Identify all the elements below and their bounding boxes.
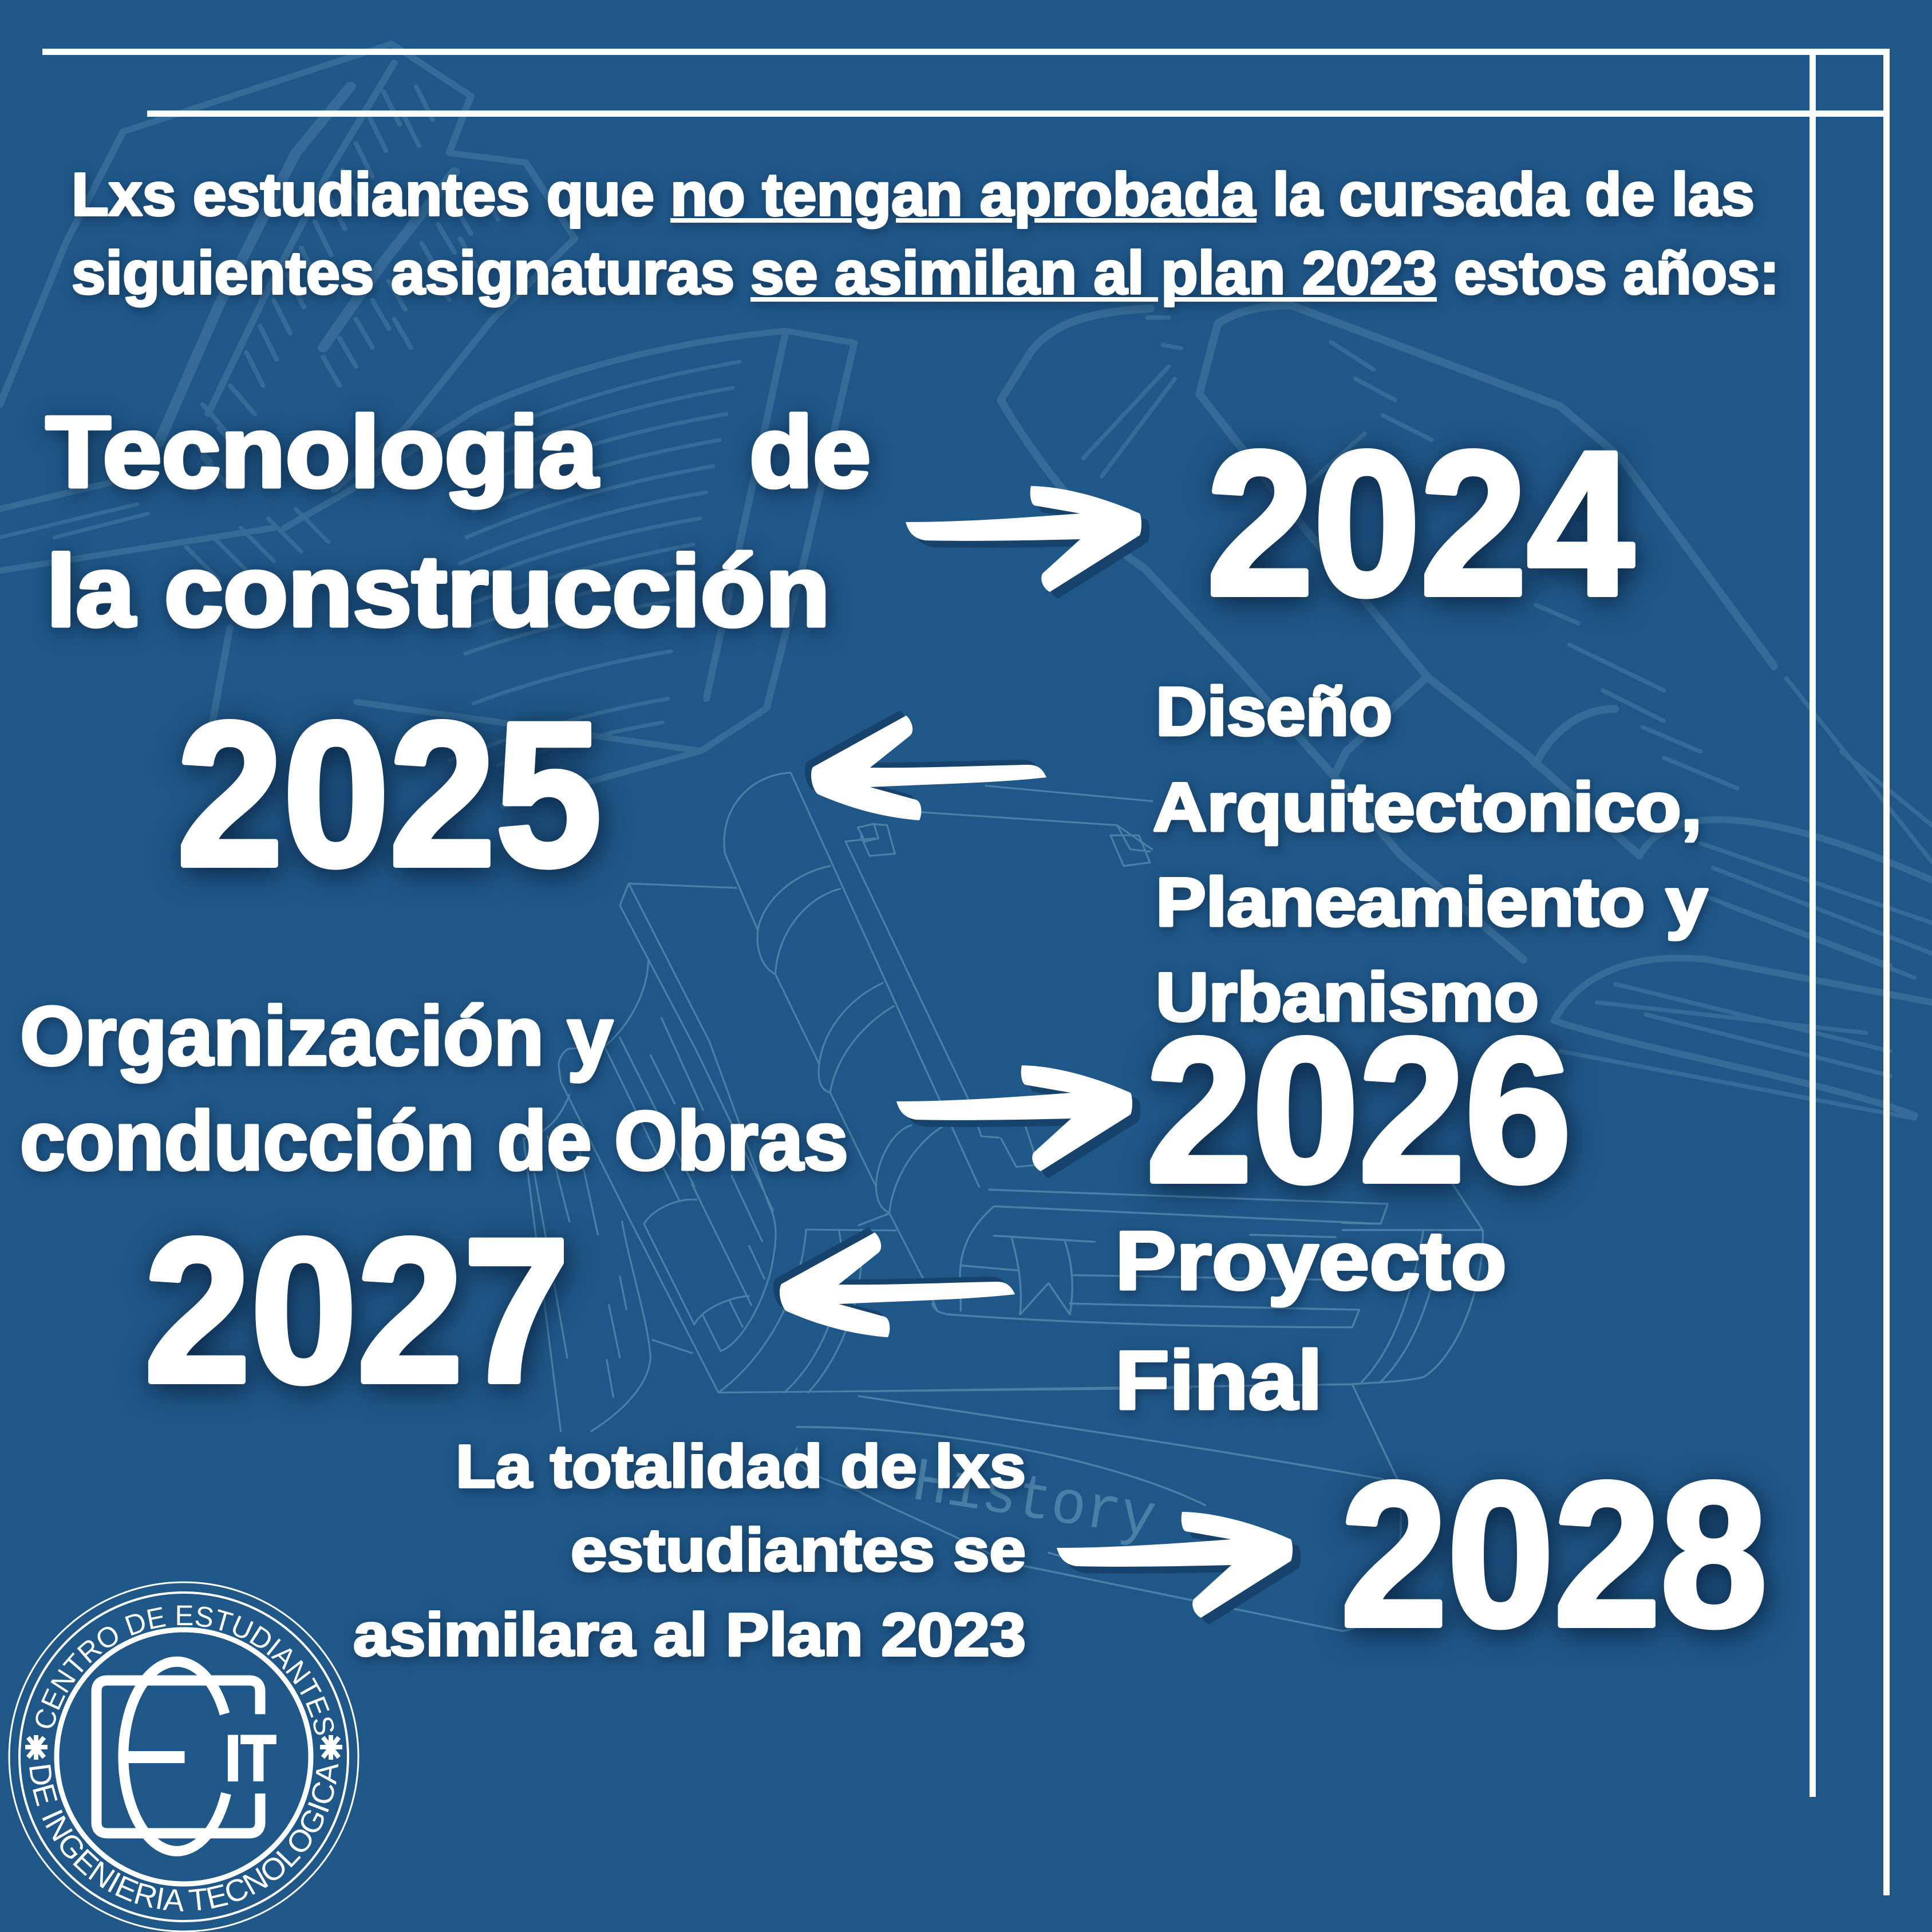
note: La totalidad de lxs estudiantes se asimilara al Plan 2023: asimilara al Plan 2023 [353,1601,1026,1669]
subject: Diseño Arquitectonico, Planeamiento y Urbanismo: Planeamiento y [1156,864,1708,941]
intro text: Lxs estudiantes que [72,161,654,228]
subject: Proyecto Final: Final [1115,1334,1322,1427]
arrow to 2025 [805,710,1046,820]
arrow to 2027 [773,1227,1015,1337]
year 2026: 2026 [1146,995,1571,1224]
subject: Tecnologia de la construcción: Tecnologia [46,396,598,508]
background illustration: sketched books top left [0,44,854,805]
underlines [670,218,1437,302]
year 2025: 2025 [177,679,602,908]
subject: Tecnologia de la construcción: la construcción [46,535,830,647]
intro text: no tengan aprobada [670,161,1256,228]
note: La totalidad de lxs estudiantes se asimilara al Plan 2023: estudiantes se [571,1516,1026,1584]
year 2027: 2027 [144,1196,570,1425]
year 2024: 2024 [1207,409,1635,638]
year 2028: 2028 [1341,1440,1767,1669]
note: La totalidad de lxs estudiantes se asimilara al Plan 2023 [353,1433,1026,1669]
subject: Organización y conducción de Obras: conducción de Obras [20,1094,848,1187]
subject: Diseño Arquitectonico, Planeamiento y Urbanismo [1153,673,1708,1036]
intro text: se asimilan al plan 2023 [750,239,1437,307]
subject: Organización y conducción de Obras [20,989,848,1187]
background illustration: outlined leaning books [523,773,1191,1431]
intro text: la cursada de las [1273,161,1755,228]
background illustration: outlined lying books with History label [795,1168,1483,1631]
logo side stars [25,1735,342,1760]
subject: Organización y conducción de Obras: Organización y [20,989,613,1082]
subject: Proyecto Final: Proyecto [1115,1214,1507,1307]
logo ring text: CENTRO DE ESTUDIANTES [35,1605,334,1735]
logo: Centro de Estudiantes de Ingeniería Tecnológica [8,1581,359,1932]
logo ring text: DE INGENIERIA TECNOLOGICA [29,1764,339,1911]
subject: Tecnologia de la construcción [46,396,871,647]
logo emblem [96,1662,260,1851]
subject: Diseño Arquitectonico, Planeamiento y Urbanismo: Diseño [1156,673,1392,750]
logo letters IT: IT [225,1722,276,1794]
intro text: estos años: [1454,239,1779,307]
arrow to 2028 [1057,1512,1301,1625]
note: La totalidad de lxs estudiantes se asimilara al Plan 2023: La totalidad de lxs [456,1433,1026,1500]
arrow to 2024 [906,486,1149,599]
logo ring text [29,1605,339,1911]
subject: Diseño Arquitectonico, Planeamiento y Urbanismo: Urbanismo [1156,959,1539,1036]
subject: Proyecto Final [1115,1214,1507,1427]
background illustration: outlined lying books with History label: History [908,1448,1160,1555]
arrow to 2026 [896,1065,1140,1178]
subject: Diseño Arquitectonico, Planeamiento y Urbanismo: Arquitectonico, [1153,769,1702,846]
background illustration: sketched books top right [1001,305,1932,1119]
intro text [72,161,1779,307]
subject: Tecnologia de la construcción: de [749,396,871,508]
intro text: siguientes asignaturas [72,239,734,307]
